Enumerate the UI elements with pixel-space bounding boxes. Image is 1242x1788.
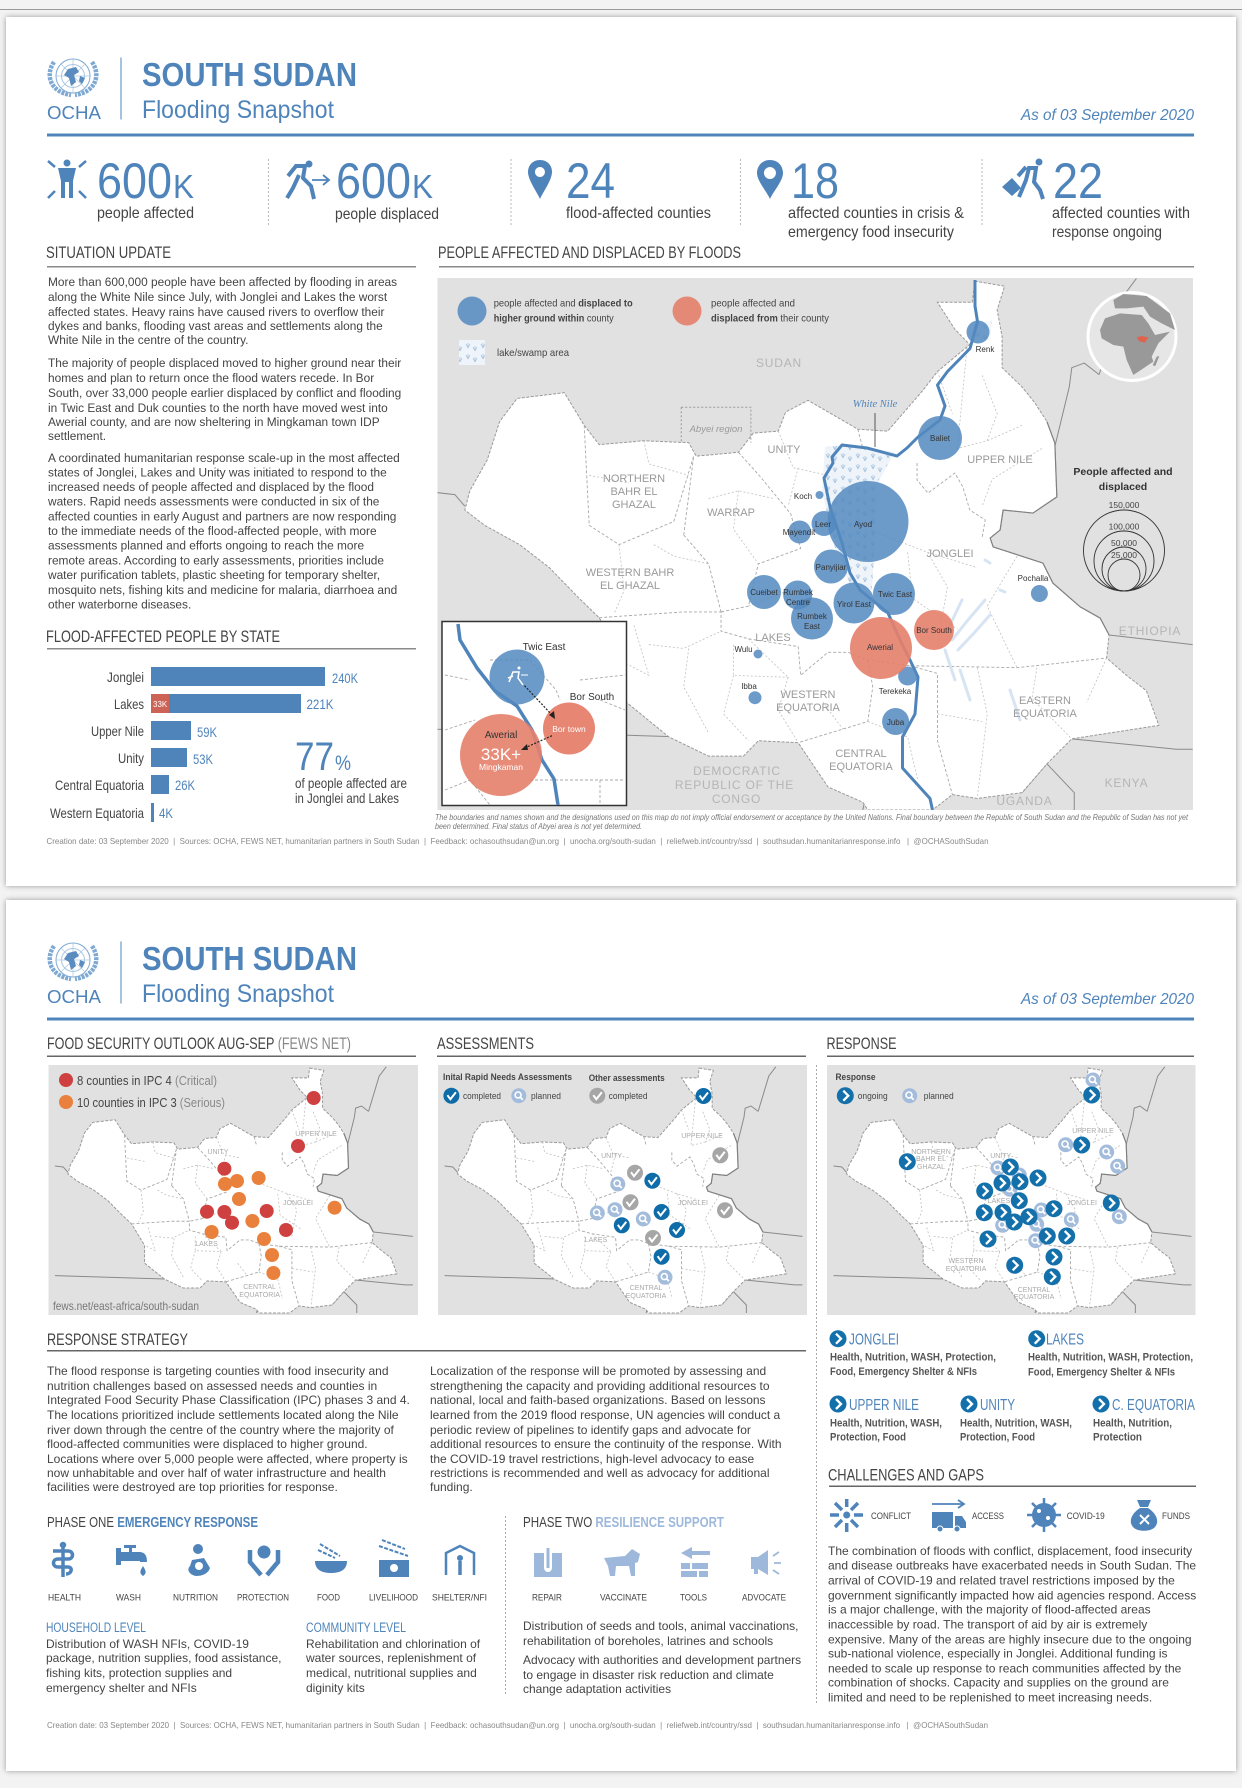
response strategy text, column one: facilities were destroyed are top priorities for response. [47, 1480, 338, 1494]
icon labels: REPAIR [532, 1592, 562, 1604]
state: Upper Nile: Protection, Food [830, 1432, 906, 1444]
heading: situation update: SITUATION UPDATE [46, 243, 171, 262]
state: Unity: UNITY [980, 1397, 1015, 1414]
map: UPPER NILE [295, 1131, 337, 1138]
situation update text: affected counties in early August and partners are now responding [48, 509, 396, 524]
bar chart: flood-affected people by state: 33K [153, 700, 168, 709]
phase two text: rehabilitation of boreholes, latrines and schools [523, 1634, 773, 1648]
map: UNITY [990, 1153, 1012, 1160]
situation update text: affected states. Heavy rains have caused rivers to overflow their [48, 305, 384, 319]
state and country labels: GHAZAL [612, 499, 656, 511]
response strategy text, column two: restrictions is recommended and well as advocacy for additional [430, 1466, 770, 1480]
icon: nutrition [188, 1544, 210, 1576]
map: WESTERN [948, 1258, 984, 1265]
challenges text: is a major challenge, with the majority of flood-affected areas [828, 1602, 1151, 1616]
heading: ASSESSMENTS [437, 1034, 534, 1053]
county labels: Ibba [741, 682, 757, 691]
response strategy text, column two: the COVID-19 travel restrictions, high-level advocacy to ease [430, 1452, 754, 1466]
state and country labels: WARRAP [707, 507, 755, 519]
heading: challenges and gaps: CHALLENGES AND GAPS [828, 1466, 984, 1485]
state and country labels: LAKES [755, 632, 791, 644]
phase two text: Advocacy with authorities and development partners [523, 1653, 801, 1667]
stat: counties in crisis: affected counties in crisis & [788, 205, 964, 222]
challenges text: The combination of floods with conflict, displacement, food insecurity [828, 1544, 1192, 1558]
icon labels: LIVELIHOOD [369, 1592, 418, 1604]
map legend: lake/swamp area [497, 347, 569, 359]
state and country labels: NORTHERN [603, 473, 665, 485]
map: completed [463, 1091, 501, 1102]
bar chart: flood-affected people by state: 221K [306, 696, 334, 712]
situation update text: settlement. [48, 429, 106, 443]
state and country labels: UGANDA [996, 794, 1053, 808]
callout: 77 percent [295, 735, 407, 806]
icon: health [53, 1544, 72, 1577]
stat: counties with response: 22 [1053, 153, 1103, 209]
state: Central Equatoria [1092, 1396, 1195, 1444]
stat: people affected: 600 [97, 153, 172, 209]
bar chart: flood-affected people by state: Upper Nile [91, 723, 144, 739]
challenges text: arrival of COVID-19 and related travel restrictions imposed by the [828, 1574, 1175, 1588]
inset: Bor to Mingkaman displacement: 33K+ [481, 745, 521, 764]
state and country labels: JONGLEI [926, 548, 974, 560]
response strategy text, column two [430, 1364, 782, 1494]
bar chart: flood-affected people by state: Unity [118, 750, 144, 766]
panel: phase two [523, 1515, 801, 1696]
icon labels: ADVOCATE [742, 1592, 786, 1604]
situation update text: A coordinated humanitarian response scale-up in the most affected [48, 451, 400, 465]
size legend: 50,000 [1111, 538, 1137, 548]
response strategy text, column one: nutrition challenges based on assessed needs and counties in [47, 1379, 377, 1393]
situation update text: White Nile in the centre of the country. [48, 333, 248, 347]
map: LAKES [195, 1241, 218, 1248]
situation update text: More than 600,000 people have been affected by flooding in areas [48, 275, 397, 289]
state: Unity [960, 1396, 1072, 1444]
stat: counties in crisis: emergency food insecurity [788, 224, 954, 241]
county labels: Mayendit [783, 528, 816, 537]
stat: people displaced [287, 153, 439, 223]
situation update text: other waterborne diseases. [48, 597, 191, 612]
state and country labels [586, 356, 1181, 808]
response strategy text, column one: Integrated Food Security Phase Classification (IPC) phases 3 and 4. [47, 1393, 410, 1407]
map [48, 1065, 418, 1315]
state: Central Equatoria: Protection [1093, 1432, 1142, 1444]
bar chart: flood-affected people by state: Western Equatoria [50, 805, 144, 821]
bar chart: flood-affected people by state: 26K [175, 777, 196, 793]
icon: covid-19 [1027, 1498, 1061, 1532]
map legend: displaced from their county [711, 312, 830, 324]
county labels: Awerial [867, 643, 893, 652]
map: CENTRAL [630, 1285, 662, 1292]
state and country labels: EQUATORIA [1013, 708, 1078, 720]
response strategy text, column two: learned from the 2019 flood response, UN agencies will conduct a [430, 1408, 781, 1422]
challenges text: government significantly impacted how aid agencies respond. Access [828, 1588, 1196, 1602]
bar chart: flood-affected people by state: 53K [193, 751, 214, 767]
header page one [47, 56, 1194, 136]
phase two text: to engage in disaster risk reduction and climate [523, 1668, 774, 1682]
map: UPPER NILE [681, 1133, 723, 1140]
icon labels: HEALTH [48, 1592, 81, 1604]
county labels: Pochalla [1018, 574, 1049, 583]
response strategy text, column two: strengthening the capacity and providing additional resources to [430, 1379, 770, 1393]
size legend: 25,000 [1111, 550, 1137, 560]
icon: vaccinate [604, 1549, 640, 1576]
county labels: Yirol East [837, 600, 872, 609]
lake and swamp areas [822, 320, 1020, 720]
map: LAKES [988, 1198, 1011, 1205]
situation update text: South, over 33,000 people earlier displaced by conflict and flooding [48, 386, 401, 400]
challenge icons: COVID-19 [1067, 1511, 1105, 1522]
map: planned [531, 1091, 561, 1102]
situation update text: assessments planned and efforts ongoing to reach the more [48, 538, 364, 553]
response strategy text, column one: flood-affected communities were displaced to higher ground. [47, 1437, 368, 1451]
response strategy text, column two: additional resources to ensure the continuity of the response. With [430, 1437, 782, 1451]
map: 8 counties in IPC 4 (Critical) [77, 1073, 217, 1088]
state and country labels: EQUATORIA [829, 761, 894, 773]
challenge icons: CONFLICT [871, 1511, 911, 1522]
map: UNITY [601, 1153, 622, 1160]
county labels: Terekeka [879, 687, 912, 696]
header page two [47, 940, 1194, 1020]
heading: FOOD SECURITY OUTLOOK AUG-SEP (FEWS NET) [47, 1034, 351, 1053]
situation update text: mosquito nets, fishing kits and medicine for malaria, diarrhoea and [48, 583, 397, 597]
icon labels: FOOD [317, 1592, 340, 1604]
stat: counties with response: response ongoing [1052, 224, 1162, 241]
county labels: Panyijiar [816, 563, 847, 572]
inset: Bor to Mingkaman displacement [442, 622, 626, 806]
response strategy text, column two: national, local and faith-based organizations. Based on lessons [430, 1393, 766, 1407]
situation update text: states of Jonglei, Lakes and Unity was initiated to respond to the [48, 465, 387, 480]
map: BAHR EL [916, 1156, 946, 1163]
map: 10 counties in IPC 3 (Serious) [77, 1095, 225, 1110]
situation update text: Awerial county, and are now sheltering in Mingkaman town IDP [48, 415, 380, 429]
state: Jonglei: Food, Emergency Shelter & NFIs [830, 1366, 977, 1378]
callout: 77 percent: 77 [295, 735, 334, 779]
stat: flood-affected counties: flood-affected counties [566, 205, 711, 222]
map: CENTRAL [1018, 1287, 1050, 1294]
map legend [459, 298, 830, 365]
response strategy text, column one: The locations prioritized include settlements located along the Nile [47, 1408, 399, 1422]
challenge icons: ACCESS [972, 1511, 1004, 1522]
county labels: Ayod [854, 520, 872, 529]
map: JONGLEI [283, 1200, 313, 1207]
key figures [48, 153, 1190, 241]
county labels: Renk [976, 345, 995, 354]
map: JONGLEI [678, 1200, 708, 1207]
response strategy text, column one: now unhabitable and over half of water infrastructure and health [47, 1466, 386, 1480]
affected county circles [458, 296, 1048, 735]
country base map [437, 278, 1193, 810]
size legend [1073, 466, 1173, 591]
icon labels: NUTRITION [173, 1592, 218, 1604]
map: completed [609, 1091, 648, 1102]
callout: 77 percent: in Jonglei and Lakes [295, 790, 399, 806]
size legend: People affected and [1073, 466, 1173, 478]
phase two text: change adaptation activities [523, 1682, 671, 1696]
panel: response map [826, 1034, 1196, 1315]
household level: HOUSEHOLD LEVEL [46, 1620, 146, 1635]
state and country labels: KENYA [1105, 776, 1148, 790]
heading: people affected and displaced: PEOPLE AFFECTED AND DISPLACED BY FLOODS [438, 243, 741, 262]
challenge icons [830, 1498, 1190, 1532]
state and country labels: CENTRAL [835, 748, 887, 760]
situation update text: waters. Rapid needs assessments were conducted in six of the [47, 494, 380, 509]
icon: food [315, 1544, 347, 1573]
icon labels: WASH [116, 1592, 141, 1604]
state: Lakes: LAKES [1046, 1332, 1084, 1348]
map [827, 1065, 1196, 1315]
challenges text: combination of shocks. Capacity and supplies on the ground are [828, 1676, 1169, 1690]
stat: flood-affected counties [528, 153, 711, 222]
icon labels: VACCINATE [600, 1592, 647, 1604]
county labels: Koch [794, 492, 812, 501]
community level: diginity kits [306, 1681, 365, 1695]
inset: Bor to Mingkaman displacement: Mingkaman [479, 762, 523, 772]
situation update text: to the immediate needs of the flood-affected people, with more [48, 524, 377, 538]
map [438, 1065, 807, 1315]
inset: Bor to Mingkaman displacement: Awerial [485, 730, 517, 741]
community level: medical, nutritional supplies and [306, 1666, 477, 1680]
county labels: Bor South [916, 626, 952, 635]
icon: conflict [830, 1499, 863, 1532]
icon: repair [534, 1548, 562, 1577]
county labels: Cueibet [750, 588, 779, 597]
state: Central Equatoria: C. EQUATORIA [1112, 1397, 1195, 1414]
challenges text: expensive. Many of the areas are highly insecure due to the ongoing [828, 1632, 1192, 1646]
footer page two: Creation date: 03 September 2020 | Sources: OCHA, FEWS NET, humanitarian partners in South Sudan | Feedback: ochasouthsudan@un.org | unocha.org/south-sudan | reliefweb.int/country/ssd | southsudan.humanitarianresponse.info | @OCHASouthSudan [47, 1720, 988, 1730]
icon labels: PROTECTION [237, 1592, 289, 1604]
callout: 77 percent: % [335, 752, 351, 775]
state and country labels: EL GHAZAL [600, 580, 660, 592]
bar chart: flood-affected people by state [50, 667, 359, 822]
footer page one: Creation date: 03 September 2020 | Sources: OCHA, FEWS NET, humanitarian partners in South Sudan | Feedback: ochasouthsudan@un.org | unocha.org/south-sudan | reliefweb.int/country/ssd | southsudan.humanitarianresponse.info | @OCHASouthSudan [46, 836, 989, 846]
stat: people affected [48, 153, 194, 222]
community level: Rehabilitation and chlorination of [306, 1637, 481, 1651]
bar chart: flood-affected people by state: 59K [197, 724, 218, 740]
situation update text [47, 275, 401, 612]
challenges text: inaccessible by road. The transport of aid by air is extremely [828, 1618, 1147, 1632]
stat: counties in crisis [757, 153, 964, 241]
state and country labels: UPPER NILE [967, 454, 1033, 466]
icon: wash [116, 1545, 147, 1576]
map: CENTRAL [243, 1284, 276, 1291]
household level: emergency shelter and NFIs [46, 1681, 197, 1695]
map: planned [924, 1091, 954, 1102]
challenges text [828, 1544, 1196, 1704]
map disclaimer [435, 812, 1189, 831]
response strategy text, column one: Locations where over 5,000 people were affected, where property is [47, 1452, 408, 1466]
state: Jonglei: JONGLEI [849, 1332, 899, 1348]
heading: flood-affected people by state: FLOOD-AFFECTED PEOPLE BY STATE [46, 627, 280, 646]
map: EQUATORIA [239, 1292, 280, 1299]
response strategy text, column one [47, 1364, 410, 1494]
panel: food security outlook [47, 1034, 418, 1315]
community level: water sources, replenishment of [305, 1651, 477, 1665]
household level: fishing kits, protection supplies and [46, 1666, 232, 1680]
panel: response by state [830, 1330, 1195, 1444]
size legend: 150,000 [1109, 500, 1140, 510]
phase two text: Distribution of seeds and tools, animal vaccinations, [523, 1619, 798, 1633]
size legend: displaced [1099, 481, 1147, 493]
state: Central Equatoria: Health, Nutrition, [1093, 1418, 1172, 1430]
map: UNITY [208, 1149, 229, 1156]
map: NORTHERN [911, 1149, 951, 1156]
state: Jonglei [830, 1330, 996, 1378]
county labels: Rumbek [783, 588, 814, 597]
map: ongoing [858, 1091, 888, 1102]
response strategy text, column two: periodic review of pipelines to identify gaps and advocate for [430, 1423, 751, 1437]
state and country labels: BAHR EL [610, 486, 658, 498]
state: Unity: Health, Nutrition, WASH, [960, 1418, 1072, 1430]
callout: 77 percent: of people affected are [295, 775, 407, 791]
icon labels: SHELTER/NFI [432, 1592, 487, 1604]
panel: phase one [46, 1515, 487, 1695]
bar chart: flood-affected people by state: Jonglei [107, 669, 144, 685]
map legend: people affected and [711, 298, 795, 310]
icon: tools [681, 1547, 710, 1577]
map: UPPER NILE [1072, 1128, 1114, 1135]
state: Upper Nile [830, 1396, 942, 1444]
map: EQUATORIA [1014, 1294, 1055, 1301]
county labels [734, 345, 1049, 727]
community level: COMMUNITY LEVEL [306, 1620, 406, 1635]
stat: people affected: people affected [97, 205, 194, 222]
icon labels: TOOLS [680, 1592, 707, 1604]
state: Unity: Protection, Food [960, 1432, 1035, 1444]
situation update text: homes and plan to return once the flood waters recede. In Bor [48, 371, 374, 385]
state and country labels: WESTERN BAHR [586, 567, 674, 579]
map: people affected and displaced by floods [438, 278, 1193, 810]
state: Upper Nile: Health, Nutrition, WASH, [830, 1418, 942, 1430]
county labels: Centre [786, 598, 811, 607]
label: White Nile: White Nile [853, 399, 898, 410]
heading: RESPONSE [826, 1034, 896, 1053]
divider lines [506, 1065, 816, 1703]
map: Response [836, 1072, 876, 1083]
map: Inital Rapid Needs Assessments [443, 1072, 572, 1083]
icon labels [532, 1592, 786, 1604]
response strategy text, column two: funding. [430, 1480, 473, 1494]
state and country labels: UNITY [768, 444, 801, 456]
panel: assessments [437, 1034, 807, 1315]
county labels: Wulu [734, 645, 753, 654]
icon: protection [250, 1546, 278, 1575]
state: Upper Nile: UPPER NILE [849, 1397, 919, 1414]
stat: flood-affected counties: 24 [566, 153, 615, 209]
response strategy text, column one: river down through the centre of the country where the majority of [47, 1423, 395, 1437]
county labels: Baliet [930, 434, 951, 443]
household level [46, 1620, 281, 1695]
county labels: Twic East [878, 590, 913, 599]
state and country labels: SUDAN [756, 356, 802, 370]
heading: response strategy: RESPONSE STRATEGY [47, 1330, 188, 1349]
county labels: Leer [815, 520, 831, 529]
locator globe [1088, 292, 1176, 380]
bar chart: flood-affected people by state: Lakes [114, 696, 144, 712]
icon: shelter [446, 1546, 474, 1575]
situation update text: dykes and banks, flooding vast areas and settlements along the [48, 319, 383, 333]
situation update text: increased needs of people affected and displaced by the flood [48, 480, 374, 494]
situation update text: The majority of people displaced moved to higher ground near their [48, 356, 401, 370]
icon: access [932, 1500, 966, 1532]
situation update text: water purification tablets, plastic sheeting for temporary shelter, [47, 568, 380, 582]
state and country labels: EASTERN [1019, 695, 1071, 707]
state: Jonglei: Health, Nutrition, WASH, Protection, [830, 1352, 996, 1364]
state and country labels: REPUBLIC OF THE [675, 778, 794, 792]
map disclaimer: been determined. Final status of Abyei area is not yet determined. [435, 821, 642, 831]
situation update text: in Twic East and Duk counties to the north have moved west into [48, 401, 388, 415]
situation update text: along the White Nile since July, with Jonglei and Lakes the worst [48, 290, 388, 304]
map legend: higher ground within county [494, 312, 614, 324]
stat: people displaced: people displaced [335, 206, 439, 223]
household level: package, nutrition supplies, food assistance, [46, 1651, 281, 1665]
state: Lakes [1028, 1330, 1193, 1378]
challenges text: sub-national violence, especially in Jonglei. Additional funding is [828, 1646, 1168, 1660]
state and country labels: ETHIOPIA [1119, 624, 1181, 638]
map: EQUATORIA [946, 1266, 987, 1273]
challenges text: needed to scale up response to reach communities affected by the [828, 1662, 1182, 1676]
state: Lakes: Health, Nutrition, WASH, Protection, [1028, 1352, 1193, 1364]
map legend: people affected and displaced to [494, 298, 633, 310]
map: fews.net/east-africa/south-sudan [53, 1299, 199, 1313]
state and country labels: EQUATORIA [776, 702, 841, 714]
size legend: 100,000 [1109, 522, 1140, 532]
inset: Bor to Mingkaman displacement: Bor town [552, 724, 586, 734]
stat: counties with response [1002, 153, 1190, 241]
inset: Bor to Mingkaman displacement: Bor South [570, 692, 614, 703]
map: EQUATORIA [626, 1293, 667, 1300]
state and country labels: WESTERN [780, 689, 836, 701]
situation update text: remote areas. According to early assessments, priorities include [48, 553, 384, 568]
challenges text: and disease outbreaks have exacerbated needs in South Sudan. The [828, 1558, 1196, 1572]
stat: counties with response: affected counties with [1052, 205, 1190, 222]
river: White Nile [824, 280, 978, 810]
map: JONGLEI [1067, 1200, 1097, 1207]
phase two text [523, 1619, 801, 1696]
county labels: East [804, 622, 821, 631]
community level [305, 1620, 481, 1695]
heading: PHASE ONE EMERGENCY RESPONSE [47, 1515, 258, 1531]
household level: Distribution of WASH NFIs, COVID-19 [46, 1637, 249, 1651]
stat: people displaced: K [412, 168, 433, 205]
county labels: Rumbek [797, 612, 828, 621]
stat: people displaced: 600 [336, 153, 411, 209]
map: LAKES [585, 1237, 608, 1244]
challenge icons: FUNDS [1162, 1511, 1190, 1522]
state and country labels: DEMOCRATIC [693, 764, 781, 778]
stat: people affected: K [173, 168, 194, 205]
state: Lakes: Food, Emergency Shelter & NFIs [1028, 1366, 1175, 1378]
state and country labels: CONGO [712, 792, 761, 806]
icon: advocate [751, 1550, 781, 1575]
heading: PHASE TWO RESILIENCE SUPPORT [523, 1515, 724, 1531]
bar chart: flood-affected people by state: Central Equatoria [55, 777, 144, 793]
map: Other assessments [589, 1073, 665, 1084]
inset: Bor to Mingkaman displacement: Twic East [523, 642, 566, 653]
bar chart: flood-affected people by state: 240K [332, 670, 359, 686]
response strategy text, column one: The flood response is targeting counties with food insecurity and [47, 1364, 389, 1378]
state and country labels: Abyei region [689, 424, 742, 435]
icon: livelihood [379, 1540, 409, 1577]
county labels: Juba [887, 718, 905, 727]
map: GHAZAL [917, 1164, 945, 1171]
bar chart: flood-affected people by state: 4K [159, 805, 174, 821]
stat: counties in crisis: 18 [791, 153, 839, 209]
icon: funds [1131, 1500, 1157, 1531]
icon labels [48, 1592, 487, 1604]
challenges text: limited and need to be replenished to meet increasing needs. [828, 1690, 1152, 1704]
response strategy text, column two: Localization of the response will be promoted by assessing and [430, 1364, 766, 1378]
